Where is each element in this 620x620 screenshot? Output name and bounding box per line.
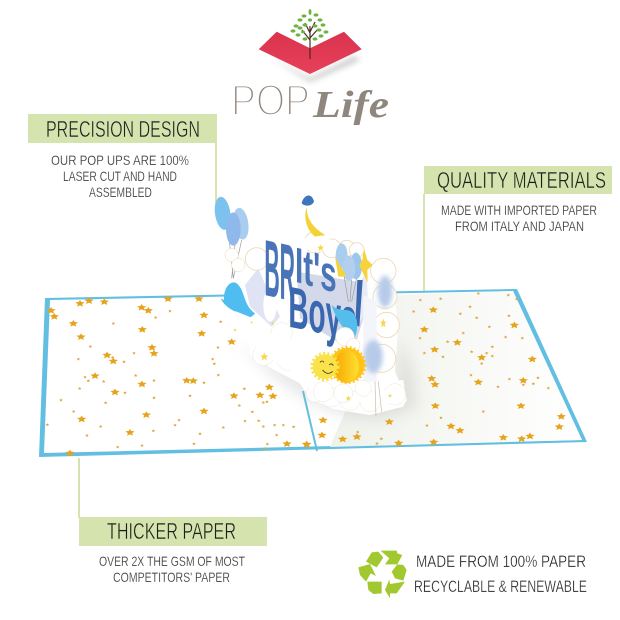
icon: right balloons bbox=[336, 243, 362, 302]
stars right page bbox=[302, 292, 566, 448]
pop-up sculpture bbox=[210, 195, 417, 418]
pop-up card bbox=[39, 289, 587, 457]
logo: red open book bbox=[259, 32, 362, 74]
logo wordmark Life: Life bbox=[312, 84, 389, 126]
icon: golden sun bbox=[330, 348, 365, 383]
front stars bbox=[233, 321, 392, 401]
body text bbox=[51, 152, 189, 200]
fold shading bbox=[330, 291, 582, 447]
blue bar behind lettering bbox=[355, 280, 363, 327]
small cloud under balloons bbox=[225, 248, 245, 272]
heading: PRECISION DESIGN bbox=[46, 116, 200, 142]
right wall panel bbox=[363, 295, 377, 382]
fold line bbox=[303, 391, 317, 451]
right wall blue shading bbox=[364, 276, 392, 373]
body text: COMPETITORS' PAPER bbox=[113, 569, 230, 585]
stars left page bbox=[45, 295, 311, 456]
connector: quality materials bbox=[423, 194, 425, 294]
body text: LASER CUT AND HAND bbox=[63, 168, 177, 184]
back cloud white patches bbox=[263, 235, 332, 322]
icon: moon with hat bbox=[302, 195, 325, 237]
logo: Pop Life bbox=[231, 9, 389, 126]
callout: quality materials bbox=[424, 166, 612, 234]
recycling statement bbox=[414, 552, 587, 596]
heading: THICKER PAPER bbox=[107, 518, 236, 544]
callout: thicker paper bbox=[79, 517, 267, 585]
connector: thicker paper bbox=[78, 458, 80, 518]
callout: precision design bbox=[28, 114, 217, 200]
lettering It's Boys: BR bbox=[264, 224, 295, 319]
front cloud ribbon bbox=[210, 308, 407, 415]
body text: ASSEMBLED bbox=[89, 184, 152, 200]
icon: tree bbox=[290, 9, 328, 59]
body text: OVER 2X THE GSM OF MOST bbox=[99, 553, 245, 569]
icon: recycling bbox=[358, 551, 407, 598]
icon: right whale bbox=[332, 305, 357, 337]
ribbon body bbox=[210, 308, 407, 415]
white paper silhouette bbox=[210, 235, 407, 415]
soft shadow bbox=[240, 335, 417, 418]
heading bar bbox=[79, 517, 267, 546]
small cloud near right whale bbox=[336, 327, 360, 352]
paper fold strip bbox=[375, 382, 382, 417]
icon: smiling sun bbox=[313, 354, 337, 379]
card blue border bbox=[39, 289, 587, 457]
card white interior bbox=[44, 291, 582, 453]
heading bar bbox=[424, 166, 612, 194]
body text: OUR POP UPS ARE 100% bbox=[51, 152, 189, 168]
body text bbox=[441, 202, 597, 234]
icon: left balloons bbox=[213, 196, 250, 278]
body text bbox=[99, 553, 245, 585]
upper word: It's bbox=[295, 236, 337, 304]
interior shading bbox=[245, 268, 368, 352]
logo shadow bbox=[270, 56, 360, 82]
icon: yellow stars on wall bbox=[317, 244, 386, 328]
back wall clouds bbox=[245, 232, 399, 372]
logo wordmark POP: POP bbox=[231, 76, 310, 125]
ribbon fill over scallops bbox=[220, 310, 397, 407]
icon: left whale bbox=[221, 282, 255, 318]
connector: precision design bbox=[215, 143, 217, 203]
pop-up sculpture: Boys bbox=[288, 275, 357, 353]
front cloud under suns bbox=[313, 380, 371, 403]
body text: FROM ITALY AND JAPAN bbox=[455, 218, 584, 234]
ribbon scallops bbox=[253, 323, 406, 412]
heading bar bbox=[28, 114, 217, 143]
